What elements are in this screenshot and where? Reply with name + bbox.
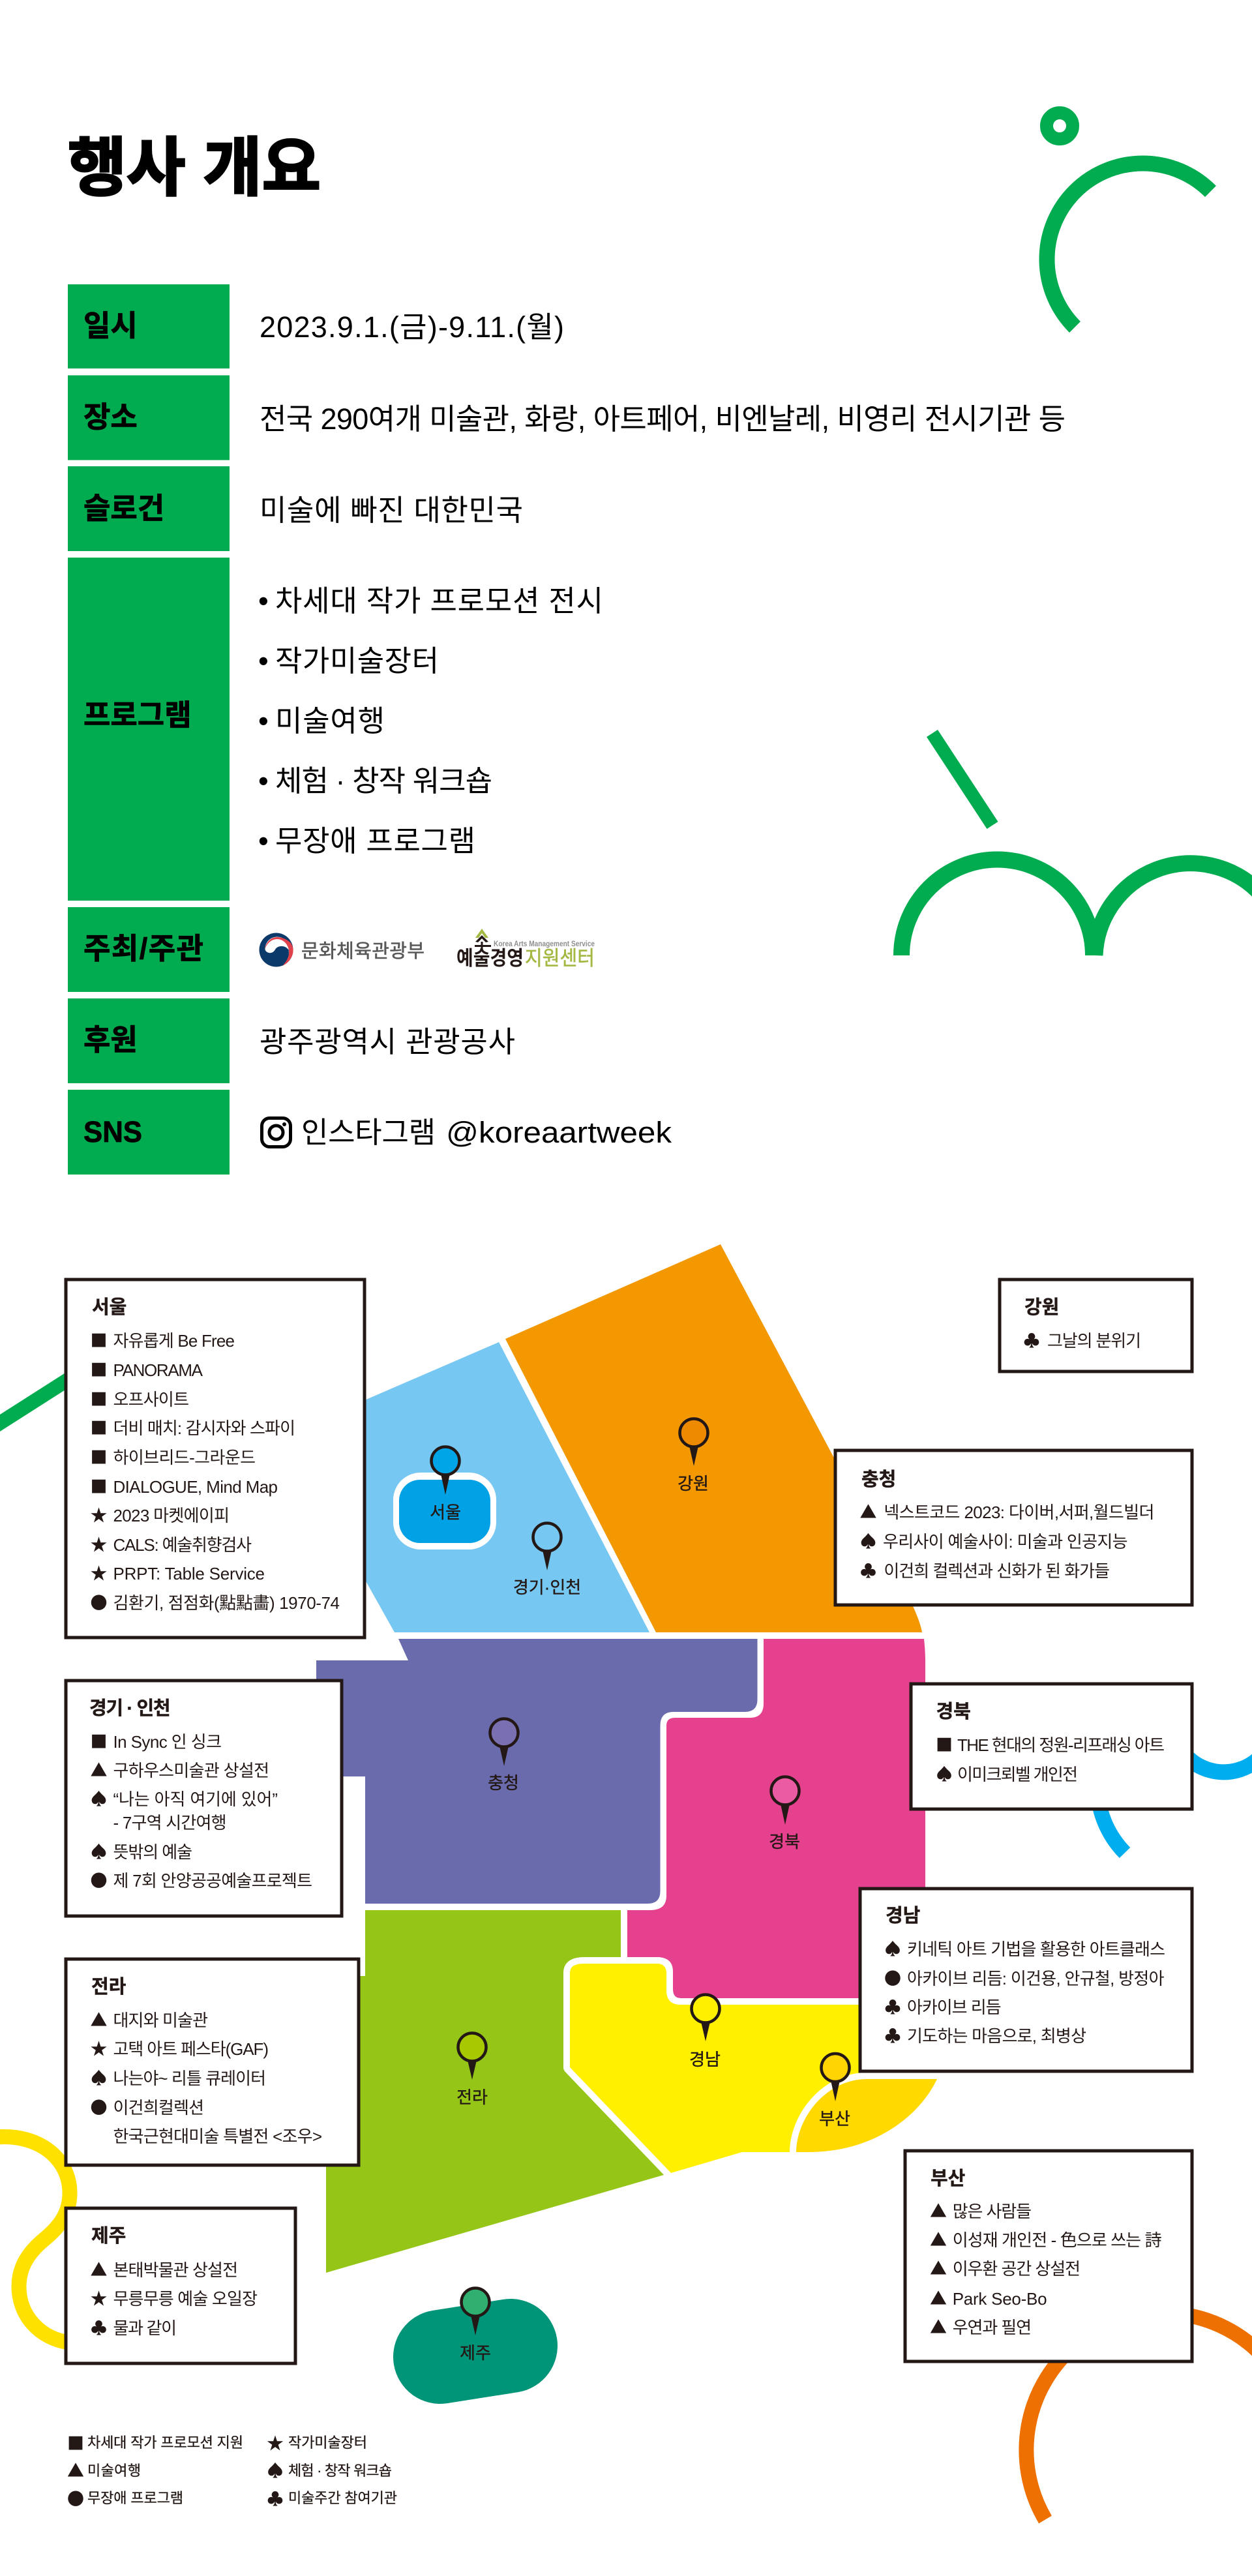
pin: Jeju: 제주 xyxy=(460,2343,491,2363)
panel: Gyeongnam list xyxy=(860,1889,1192,2071)
icon: blue arc right xyxy=(1174,1735,1252,1772)
panel: Seoul list: ■ xyxy=(90,1415,108,1439)
icon: instagram xyxy=(262,1118,291,1146)
row: program: 체험 · 창작 워크숍 xyxy=(275,764,492,798)
legend: ★ xyxy=(267,2431,284,2455)
panel: Jeju list: 제주 xyxy=(91,2225,126,2247)
legend: 미술주간 참여기관 xyxy=(288,2490,397,2506)
legend: ♣ xyxy=(267,2486,284,2510)
panel: Chungcheong list: 우리사이 예술사이: 미술과 인공지능 xyxy=(883,1532,1128,1551)
row: SNS: 인스타그램 xyxy=(301,1116,436,1149)
panel: overview table xyxy=(68,284,1066,1175)
panel: Gyeonggi-Incheon list: 구하우스미술관 상설전 xyxy=(113,1761,269,1780)
panel: Seoul list: PRPT: Table Service xyxy=(113,1564,265,1583)
panel: Gyeonggi-Incheon list xyxy=(66,1681,342,1916)
panel: Seoul list: CALS: 예술취향검사 xyxy=(113,1535,252,1555)
panel: Seoul list: 오프사이트 xyxy=(113,1390,189,1409)
row: program xyxy=(68,558,603,901)
panel: Jeolla list: 전라 xyxy=(91,1976,127,1998)
pin: Gyeongbuk xyxy=(769,1776,800,1851)
icon: green ring xyxy=(1047,113,1073,139)
panel: Seoul list: ★ xyxy=(90,1532,108,1556)
panel: Chungcheong list: 넥스트코드 2023: 다이버,서퍼,월드빌더 xyxy=(884,1503,1154,1522)
panel: Jeju list: ♣ xyxy=(90,2315,108,2339)
row: host xyxy=(68,907,595,992)
row: slogan xyxy=(68,466,523,551)
region: Jeolla xyxy=(326,1910,664,2273)
panel: Seoul list: 더비 매치: 감시자와 스파이 xyxy=(113,1418,295,1438)
row: sponsor: 후원 xyxy=(83,1023,138,1056)
panel: Gyeonggi-Incheon list: 경기 · 인천 xyxy=(89,1698,171,1719)
pin: Gangwon: 강원 xyxy=(678,1474,709,1493)
row: program: • xyxy=(258,704,269,738)
panel: Busan list: ▲ xyxy=(930,2286,947,2310)
panel: Busan list: ▲ xyxy=(930,2227,947,2251)
panel: Chungcheong list: ♣ xyxy=(859,1558,877,1582)
panel: Gyeongnam list: ♣ xyxy=(884,1994,901,2018)
panel: Gangwon list: 강원 xyxy=(1024,1296,1059,1318)
row: program: • xyxy=(258,644,269,678)
row: program: 무장애 프로그램 xyxy=(275,824,475,858)
panel: Seoul list: 자유롭게 Be Free xyxy=(113,1331,235,1351)
panel: Jeolla list: ★ xyxy=(90,2036,108,2060)
panel: Gyeongbuk list: ♠ xyxy=(936,1761,953,1786)
region: Seoul xyxy=(393,1473,496,1550)
panel: Busan list: ▲ xyxy=(930,2198,947,2223)
legend: 차세대 작가 프로모션 지원 xyxy=(87,2434,243,2451)
pin: Busan: 부산 xyxy=(819,2109,850,2129)
panel: Gyeongbuk list: 경북 xyxy=(936,1701,971,1722)
panel: Jeju list: ▲ xyxy=(90,2257,108,2281)
panel: Gyeonggi-Incheon list: - 7구역 시간여행 xyxy=(113,1813,227,1833)
pin: Chungcheong xyxy=(488,1719,519,1793)
row: sponsor: 광주광역시 관광공사 xyxy=(260,1025,515,1058)
panel: Gyeonggi-Incheon list: In Sync 인 싱크 xyxy=(113,1732,222,1752)
pin: Gyeonggi: 경기·인천 xyxy=(513,1578,581,1597)
panel: Seoul list: DIALOGUE, Mind Map xyxy=(113,1477,278,1497)
panel: Jeolla list: 대지와 미술관 xyxy=(113,2011,208,2030)
row: program: 차세대 작가 프로모션 전시 xyxy=(275,584,603,618)
panel: Gyeonggi-Incheon list: ● xyxy=(90,1868,108,1892)
legend: ■ xyxy=(67,2431,84,2455)
panel: Jeolla list: 한국근현대미술 특별전 <조우> xyxy=(113,2127,322,2146)
panel: Gyeongbuk list xyxy=(911,1684,1192,1809)
pin: Jeolla xyxy=(456,2033,488,2107)
panel: Seoul list: 서울 xyxy=(92,1296,127,1318)
panel: Gyeongnam list: 경남 xyxy=(886,1905,920,1926)
map of Korea regions xyxy=(316,1244,937,2357)
panel: Gyeongnam list: ● xyxy=(884,1966,901,1990)
row: date: 2023.9.1.(금)-9.11.(월) xyxy=(260,310,564,344)
legend xyxy=(67,2431,397,2510)
row: program: • xyxy=(258,824,269,858)
icon: blue arc lower xyxy=(1097,1784,1125,1853)
row: venue: 전국 290여개 미술관, 화랑, 아트페어, 비엔날레, 비영리 전시기관 등 xyxy=(260,402,1066,436)
pin: Gyeongbuk: 경북 xyxy=(769,1832,800,1851)
row: venue xyxy=(68,376,1066,460)
panel: Jeolla list: ▲ xyxy=(90,2007,108,2031)
panel: Jeju list: 본태박물관 상설전 xyxy=(113,2260,238,2280)
pin: Gyeongnam: 경남 xyxy=(689,2050,721,2069)
panel: Gangwon list: ♣ xyxy=(1023,1328,1040,1352)
panel: Gyeonggi-Incheon list: ■ xyxy=(90,1729,108,1753)
panel: Gyeonggi-Incheon list: ▲ xyxy=(90,1758,108,1782)
panel: Gyeongnam list: 기도하는 마음으로, 최병상 xyxy=(907,2026,1086,2046)
row: SNS: @koreaartweek xyxy=(446,1116,672,1149)
row: program: 프로그램 xyxy=(83,698,192,732)
legend: 무장애 프로그램 xyxy=(87,2490,183,2506)
panel: Gyeongbuk list: 이미크뢰벨 개인전 xyxy=(957,1765,1078,1784)
row: program: 미술여행 xyxy=(275,704,385,738)
panel: Gyeongnam list: 아카이브 리듬: 이건용, 안규철, 방정아 xyxy=(907,1969,1165,1988)
region: Chungcheong xyxy=(316,1639,758,1904)
panel: Jeolla list xyxy=(66,1959,359,2165)
pin: Jeju xyxy=(460,2288,491,2363)
row: program: • xyxy=(258,764,269,798)
region: Busan xyxy=(796,2079,937,2152)
pin: Seoul: 서울 xyxy=(430,1503,461,1522)
panel: Seoul list: PANORAMA xyxy=(113,1360,203,1380)
pin: Gangwon xyxy=(678,1419,709,1493)
panel: Gyeonggi-Incheon list: 제 7회 안양공공예술프로젝트 xyxy=(113,1871,312,1891)
legend: ♠ xyxy=(267,2458,284,2482)
region: Jeju xyxy=(440,2346,511,2357)
legend: 미술여행 xyxy=(87,2463,141,2479)
panel: Jeolla list: 나는야~ 리틀 큐레이터 xyxy=(113,2069,266,2088)
pin: Jeolla: 전라 xyxy=(456,2088,488,2107)
row: program: 작가미술장터 xyxy=(275,644,439,678)
panel: Gangwon list: 그날의 분위기 xyxy=(1047,1331,1141,1351)
row: venue: 장소 xyxy=(83,400,138,434)
panel: Busan list xyxy=(905,2151,1192,2361)
region: Gyeongnam xyxy=(570,1964,861,2173)
panel: Seoul list: ■ xyxy=(90,1328,108,1352)
panel: Jeju list: 무릉무릉 예술 오일장 xyxy=(113,2289,258,2309)
row: date: 일시 xyxy=(83,309,138,342)
panel: Gyeongnam list: ♣ xyxy=(884,2023,901,2047)
pin: Gyeongnam xyxy=(689,1994,721,2069)
panel: Seoul list: ■ xyxy=(90,1445,108,1469)
panel: Seoul list: ★ xyxy=(90,1503,108,1527)
panel: Seoul list: 2023 마켓에이피 xyxy=(113,1506,230,1525)
region: Gyeonggi xyxy=(359,1342,649,1632)
panel: Gyeongnam list: 아카이브 리듬 xyxy=(907,1998,1002,2017)
icon: arts management logo: 지원센터 xyxy=(525,947,595,970)
panel: Jeju list xyxy=(66,2208,295,2363)
icon: green arc top right xyxy=(1047,163,1210,327)
icon: yellow squiggle left xyxy=(0,2137,70,2343)
panel: Seoul list: ■ xyxy=(90,1357,108,1381)
icon: government emblem logo: 문화체육관광부 xyxy=(301,941,425,962)
row: host: 주최/주관 xyxy=(83,932,203,965)
icon: green diagonal stroke xyxy=(927,730,998,829)
row: SNS: SNS xyxy=(83,1115,142,1148)
row: slogan: 슬로건 xyxy=(83,492,164,525)
icon: arts management logo xyxy=(456,929,595,970)
panel: Busan list: 많은 사람들 xyxy=(953,2202,1032,2221)
panel: Chungcheong list xyxy=(835,1450,1192,1605)
panel: Chungcheong list: ▲ xyxy=(859,1499,877,1523)
icon: green double arch xyxy=(901,860,1252,955)
legend: 체험 · 창작 워크숍 xyxy=(288,2463,392,2479)
panel: Busan list: 이성재 개인전 - 色으로 쓰는 詩 xyxy=(953,2230,1162,2250)
panel: Seoul list: 김환기, 점점화(點點畵) 1970-74 xyxy=(113,1593,340,1613)
panel: Jeju list: ★ xyxy=(90,2286,108,2310)
panel: Gyeongnam list: 키네틱 아트 기법을 활용한 아트클래스 xyxy=(907,1939,1165,1959)
legend: 작가미술장터 xyxy=(288,2434,367,2451)
icon: arts management logo: Korea Arts Management Service xyxy=(494,940,595,948)
panel: Seoul list: ■ xyxy=(90,1386,108,1411)
panel: Busan list: 부산 xyxy=(931,2168,965,2189)
title: 행사 개요 xyxy=(68,132,321,203)
panel: Jeolla list: ♠ xyxy=(90,2065,108,2089)
panel: Chungcheong list: 이건희 컬렉션과 신화가 된 화가들 xyxy=(884,1561,1110,1581)
row: slogan: 미술에 빠진 대한민국 xyxy=(260,494,523,527)
panel: Gyeonggi-Incheon list: 뜻밖의 예술 xyxy=(113,1842,192,1862)
panel: Busan list: 이우환 공간 상설전 xyxy=(953,2259,1081,2279)
panel: Jeolla list: 이건희컬렉션 xyxy=(113,2098,204,2118)
panel: Seoul list xyxy=(66,1280,365,1638)
pin: Seoul xyxy=(430,1446,461,1522)
panel: Gangwon list xyxy=(1000,1280,1192,1371)
panel: Seoul list: ★ xyxy=(90,1561,108,1585)
pin: Busan xyxy=(819,2054,850,2129)
panel: Seoul list: ■ xyxy=(90,1474,108,1498)
panel: Gyeonggi-Incheon list: “나는 아직 여기에 있어” xyxy=(113,1790,278,1809)
panel: Seoul list: ● xyxy=(90,1590,108,1614)
region: Gyeongbuk xyxy=(627,1639,925,1998)
panel: Gyeongnam list: ♠ xyxy=(884,1936,901,1960)
panel: Seoul list: 하이브리드-그라운드 xyxy=(113,1448,256,1467)
panel: Gyeongbuk list: THE 현대의 정원-리프래싱 아트 xyxy=(957,1735,1165,1755)
region: Gangwon xyxy=(505,1244,922,1632)
panel: Gyeonggi-Incheon list: ♠ xyxy=(90,1786,108,1810)
panel: Jeolla list: ● xyxy=(90,2095,108,2119)
row: sponsor xyxy=(68,998,515,1083)
pin: Gyeonggi xyxy=(513,1523,581,1597)
panel: Chungcheong list: 충청 xyxy=(861,1469,896,1490)
panel: Busan list: ▲ xyxy=(930,2314,947,2339)
panel: Busan list: 우연과 필연 xyxy=(953,2318,1032,2337)
row: date xyxy=(68,284,564,368)
panel: Jeju list: 물과 같이 xyxy=(113,2318,177,2338)
panel: Gyeonggi-Incheon list: ♠ xyxy=(90,1839,108,1863)
panel: Chungcheong list: ♠ xyxy=(859,1529,877,1553)
row: program: • xyxy=(258,584,269,618)
legend: ● xyxy=(67,2486,84,2510)
legend: ▲ xyxy=(67,2458,84,2482)
icon: arts management logo: 예술경영 xyxy=(456,947,524,970)
panel: Busan list: ▲ xyxy=(930,2256,947,2280)
panel: Busan list: Park Seo-Bo xyxy=(953,2289,1047,2309)
row: SNS xyxy=(68,1090,672,1175)
panel: Gyeongbuk list: ■ xyxy=(936,1732,953,1756)
icon: orange arc xyxy=(1026,2313,1252,2520)
pin: Chungcheong: 충청 xyxy=(488,1773,519,1793)
icon: government emblem logo xyxy=(260,933,425,966)
icon: green line left xyxy=(0,1371,68,1431)
panel: Jeolla list: 고택 아트 페스타(GAF) xyxy=(113,2039,269,2059)
